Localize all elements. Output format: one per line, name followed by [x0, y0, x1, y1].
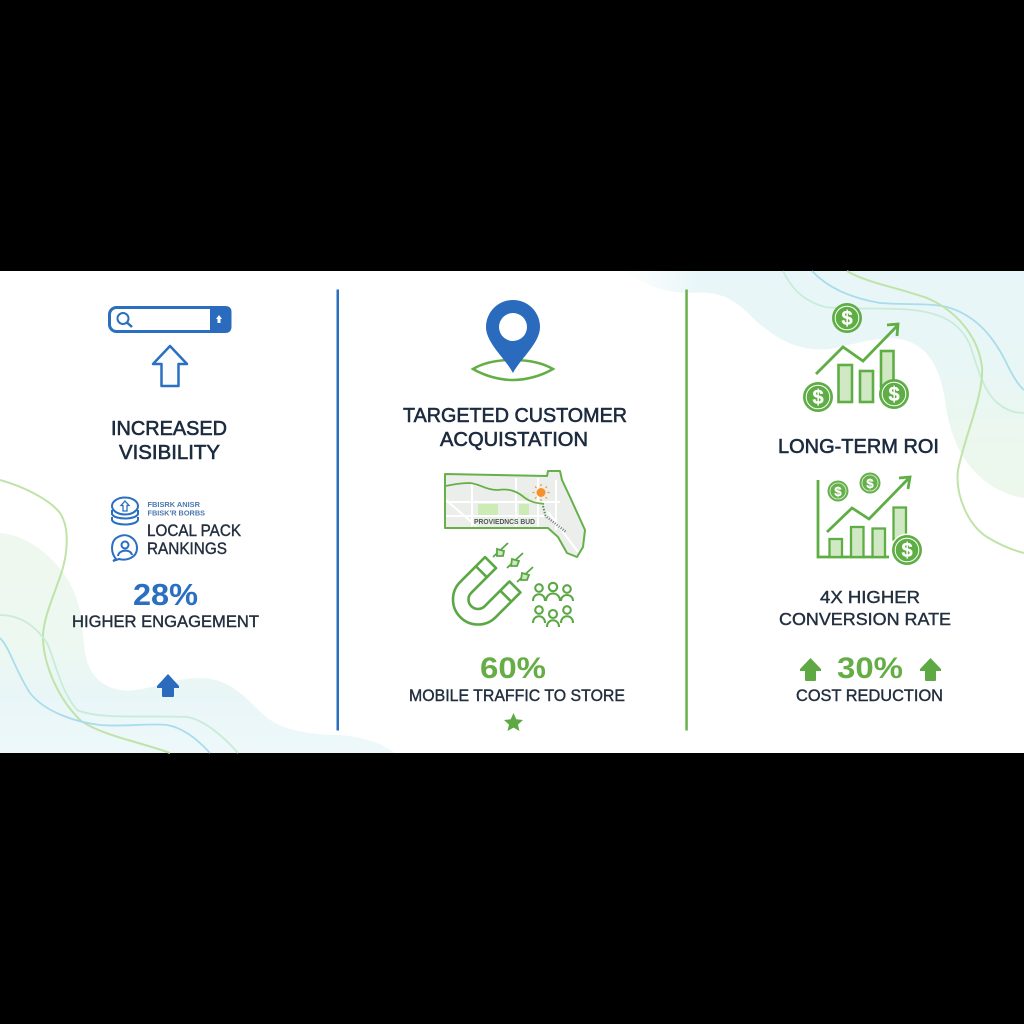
label: higher engagement: HIGHER ENGAGEMENT	[72, 612, 259, 631]
heading: long-term roi: LONG-TERM ROI	[778, 436, 939, 458]
label: cost reduction: COST REDUCTION	[796, 687, 943, 705]
small caption text	[148, 500, 205, 518]
background wave: bottom left	[0, 480, 395, 753]
chart: growth axis with bars: $	[901, 540, 913, 562]
icon: state map: PROVIEDNCS BUD	[474, 517, 536, 526]
heading: increased visibility: INCREASED	[111, 418, 227, 440]
chart: rising bars with coins: $	[888, 384, 900, 406]
panel: increased visibility	[72, 306, 259, 697]
stat: 28%: 28%	[133, 577, 198, 612]
icon: search bar	[110, 306, 232, 333]
heading: targeted customer acquistation	[403, 405, 627, 451]
heading: targeted customer acquistation: ACQUISTATION	[440, 429, 588, 451]
chart: rising bars with coins: $	[812, 387, 824, 409]
label: local pack rankings	[147, 521, 242, 558]
label: 4x higher conversion rate	[779, 587, 951, 629]
heading: increased visibility: VISIBILITY	[119, 442, 220, 464]
heading: targeted customer acquistation: TARGETED CUSTOMER	[403, 405, 627, 427]
icon: state map	[445, 471, 585, 557]
chart: growth axis with bars	[818, 472, 924, 566]
blue divider	[336, 290, 339, 730]
icon: chat person	[112, 535, 137, 561]
white banner panel	[0, 271, 1024, 753]
icon: star	[504, 713, 523, 731]
icon: customer group	[533, 583, 573, 627]
chart: rising bars with coins	[803, 303, 909, 412]
icon: magnet	[443, 557, 520, 635]
icon: magnet sparks	[493, 543, 533, 582]
label: mobile traffic to store: MOBILE TRAFFIC TO STORE	[409, 687, 625, 705]
small caption text: FBISK'R BORBS	[148, 508, 205, 518]
label: 4x higher conversion rate: CONVERSION RATE	[779, 609, 951, 629]
label: local pack rankings: RANKINGS	[147, 539, 227, 558]
icon: coin stack	[112, 498, 138, 524]
green divider	[685, 290, 688, 730]
label: 4x higher conversion rate: 4X HIGHER	[820, 587, 920, 607]
stat: 30%: 30%	[837, 652, 903, 685]
label: local pack rankings: LOCAL PACK	[147, 521, 242, 540]
panel: targeted customer acquisition	[403, 300, 627, 731]
chart: rising bars with coins: $	[841, 308, 853, 330]
stat: 60%: 60%	[480, 652, 546, 685]
heading: increased visibility	[111, 418, 227, 464]
icon: solid up arrow	[157, 674, 179, 697]
chart: growth axis with bars: $	[834, 484, 842, 499]
icon: outlined up arrow	[153, 346, 187, 386]
icon: right green arrow	[920, 658, 941, 681]
panel: long-term roi	[778, 303, 951, 705]
background wave: top right	[620, 271, 1024, 553]
icon: map pin	[473, 300, 553, 380]
icon: left green arrow	[800, 658, 821, 681]
small caption text: FBISRK ANISR	[148, 500, 201, 509]
chart: growth axis with bars: $	[866, 476, 874, 491]
